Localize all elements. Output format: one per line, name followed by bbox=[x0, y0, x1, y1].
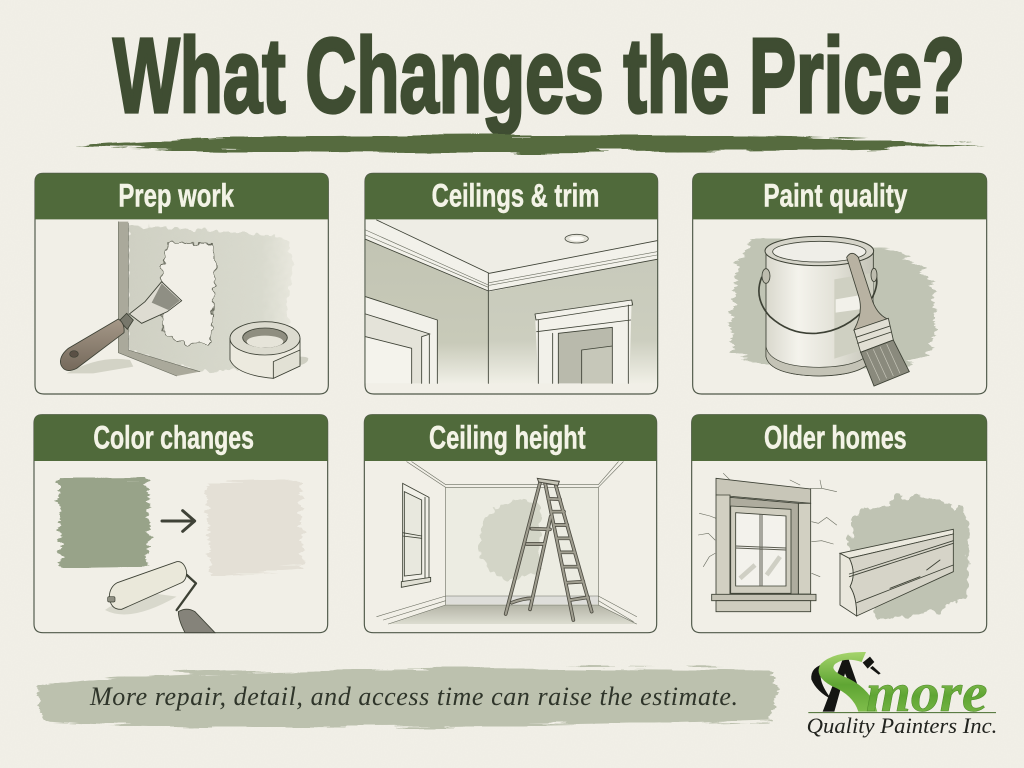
recessed light bbox=[565, 234, 588, 243]
paint brush bbox=[847, 253, 909, 386]
panel frame bbox=[35, 173, 328, 394]
logo word more: more bbox=[866, 662, 988, 723]
title brush underline bbox=[76, 134, 985, 152]
panel frame bbox=[693, 173, 987, 394]
panel frame bbox=[365, 173, 658, 394]
panel: paint quality bbox=[693, 173, 987, 394]
header: older homes bbox=[692, 415, 987, 461]
footer message: More repair, detail, and access time can raise the estimate. bbox=[89, 682, 738, 711]
panel: ceilings and trim bbox=[365, 173, 658, 394]
panel frame bbox=[692, 415, 987, 633]
logo tagline: Quality Painters Inc. bbox=[807, 713, 997, 738]
scraper bbox=[60, 282, 182, 371]
illustration: wall with patch, scraper and tape bbox=[60, 222, 308, 378]
header: paint quality bbox=[693, 173, 987, 219]
illustration: paint can and brush bbox=[730, 236, 935, 386]
arrow bbox=[162, 511, 195, 531]
wavy patch bbox=[162, 243, 215, 344]
right door casing bbox=[535, 300, 633, 383]
swatch: old green colour bbox=[58, 478, 149, 569]
illustration: room with ladder bbox=[377, 462, 637, 624]
header: prep work: Prep work bbox=[118, 178, 234, 214]
footer brush banner bbox=[38, 668, 778, 727]
illustration: old window with cracks bbox=[698, 473, 837, 612]
header: ceilings and trim: Ceilings & trim bbox=[432, 178, 599, 214]
window bbox=[401, 483, 431, 587]
header: prep work bbox=[35, 173, 328, 219]
header: color changes bbox=[34, 415, 328, 461]
panel: prep work bbox=[35, 173, 328, 394]
panel frame bbox=[364, 415, 657, 633]
tape roll bbox=[230, 322, 308, 378]
logo baseline bbox=[808, 711, 996, 714]
header: ceiling height bbox=[364, 415, 657, 461]
logo: Amore Quality Painters Inc. bbox=[807, 652, 997, 738]
illustration: crown moulding corner and door casings bbox=[366, 219, 657, 383]
panel: ceiling height bbox=[364, 415, 657, 633]
panel frame bbox=[34, 415, 328, 633]
header: color changes: Color changes bbox=[93, 419, 254, 455]
logo paint brush bbox=[863, 657, 881, 675]
logo letter A bbox=[823, 659, 859, 712]
logo green swoosh bbox=[819, 652, 877, 712]
swatch: new light colour bbox=[207, 478, 303, 575]
panel: color changes bbox=[34, 415, 328, 633]
paint patch on wall bbox=[478, 499, 540, 581]
illustration: paint roller bbox=[105, 562, 215, 633]
paint can bbox=[759, 236, 877, 376]
panel: older homes bbox=[692, 415, 987, 633]
header: ceilings and trim bbox=[365, 173, 658, 219]
header: paint quality: Paint quality bbox=[763, 178, 907, 214]
header: older homes: Older homes bbox=[764, 419, 907, 455]
header: ceiling height: Ceiling height bbox=[429, 419, 586, 455]
left door casing bbox=[366, 297, 437, 383]
illustration: worn moulding bbox=[840, 496, 968, 618]
logo black swoosh bbox=[811, 663, 832, 699]
step ladder bbox=[506, 478, 592, 620]
